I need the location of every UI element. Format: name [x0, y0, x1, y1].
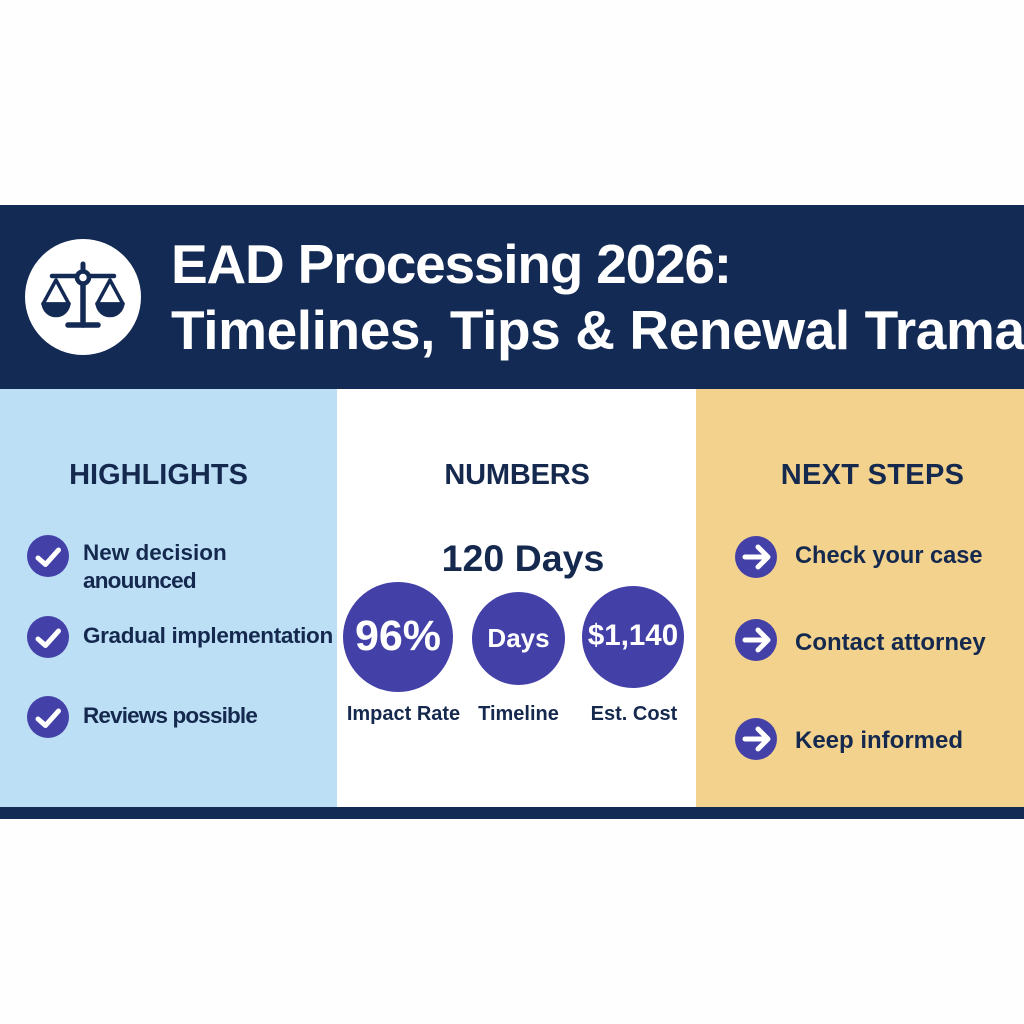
stat circle: days — [472, 592, 565, 685]
title — [171, 233, 1024, 361]
text: contact attorney: Contact attorney — [795, 629, 986, 656]
header banner — [0, 205, 1024, 389]
text: new decision — [83, 540, 227, 593]
stat circle: cost — [582, 586, 684, 688]
heading: highlights: HIGHLIGHTS — [69, 459, 248, 491]
title: EAD Processing 2026: — [171, 233, 731, 295]
label: timeline: Timeline — [478, 703, 559, 725]
text: new decision: anouunced — [83, 568, 196, 593]
icon: scales of justice — [25, 239, 141, 355]
icon: check 2 — [27, 616, 69, 658]
panel: next steps — [696, 389, 1024, 807]
icon: check 3 — [27, 696, 69, 738]
icon: arrow 3 — [735, 718, 777, 760]
text: reviews possible: Reviews possible — [83, 703, 257, 728]
footer bar — [0, 807, 1024, 819]
text: new decision: New decision — [83, 540, 227, 565]
icon: arrow 2 — [735, 619, 777, 661]
panel: highlights — [0, 389, 337, 807]
stat circle: days: Days — [487, 623, 550, 653]
label: est. cost: Est. Cost — [591, 703, 677, 725]
stat circle: 96%: 96% — [355, 612, 441, 660]
icon: check 1 — [27, 535, 69, 577]
heading: next steps: NEXT STEPS — [781, 459, 964, 491]
stat circle: 96% — [343, 582, 453, 692]
text: keep informed: Keep informed — [795, 727, 963, 754]
heading: numbers: NUMBERS — [444, 459, 590, 491]
panel: numbers — [337, 389, 696, 807]
stat circle: cost: $1,140 — [588, 619, 678, 652]
title: Timelines, Tips & Renewal Trama — [171, 299, 1024, 361]
text: gradual implementation: Gradual implementation — [83, 623, 333, 648]
stat: 120 days: 120 Days — [442, 537, 604, 579]
text: check your case: Check your case — [795, 543, 983, 569]
icon: arrow 1 — [735, 536, 777, 578]
label: impact rate: Impact Rate — [347, 703, 460, 725]
